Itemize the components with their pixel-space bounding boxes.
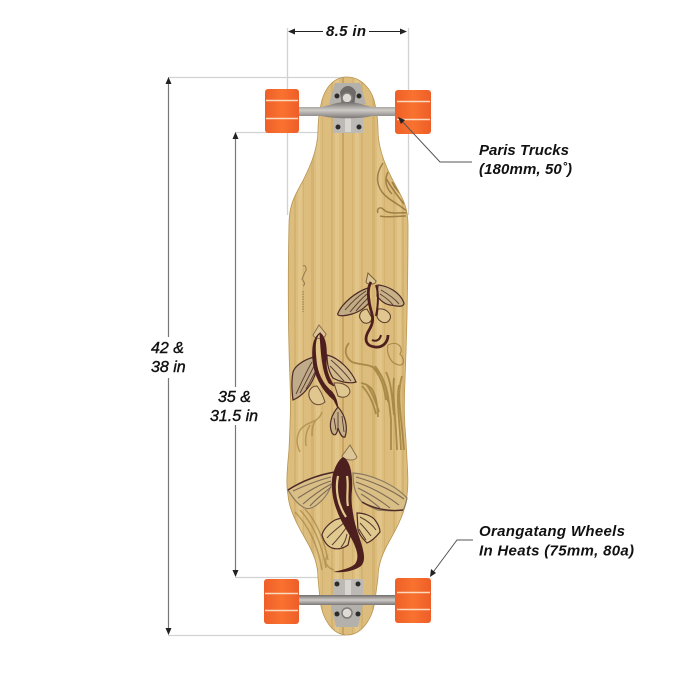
brand mark xyxy=(302,266,306,312)
left fin xyxy=(322,518,353,549)
top truck xyxy=(299,83,397,133)
wheel: bottom right xyxy=(395,578,431,623)
dimension: wheelbase: 35 & xyxy=(218,389,251,406)
fish: upper right xyxy=(338,273,404,347)
wheel: bottom left xyxy=(264,579,299,624)
extension guide lines xyxy=(168,28,408,636)
longboard deck xyxy=(286,76,408,636)
dimension: overall length: 38 in xyxy=(151,359,186,376)
callout: wheels: In Heats (75mm, 80a) xyxy=(479,542,634,560)
right wing xyxy=(353,473,407,511)
wheel: top right xyxy=(395,90,431,134)
callout: trucks: Paris Trucks xyxy=(479,142,569,159)
dimension: overall length: 42 & xyxy=(151,340,184,357)
body highlight xyxy=(337,476,348,517)
callout: trucks: (180mm, 50˚) xyxy=(479,161,572,178)
dimension: wheelbase xyxy=(210,132,258,577)
callout: wheels: Orangatang Wheels xyxy=(479,523,625,540)
swirl decoration: top right xyxy=(378,163,408,217)
fish: lower large xyxy=(288,445,407,572)
callout: trucks xyxy=(398,117,572,178)
head xyxy=(342,445,357,460)
bottom truck xyxy=(298,579,397,627)
left wing xyxy=(288,472,335,509)
dimension: width 8.5 in: 8.5 in xyxy=(326,23,366,40)
callout: wheels xyxy=(430,523,634,577)
dimension: width 8.5 in xyxy=(288,23,407,40)
right fin xyxy=(357,513,380,543)
dimension: wheelbase: 31.5 in xyxy=(210,408,258,425)
wheel: top left xyxy=(265,89,299,133)
swirl decoration: middle waves xyxy=(346,343,404,450)
dimension: overall length xyxy=(151,77,186,635)
fish: middle left xyxy=(292,325,356,437)
swirl decoration: lower left xyxy=(292,412,334,570)
body and tail xyxy=(332,457,364,572)
